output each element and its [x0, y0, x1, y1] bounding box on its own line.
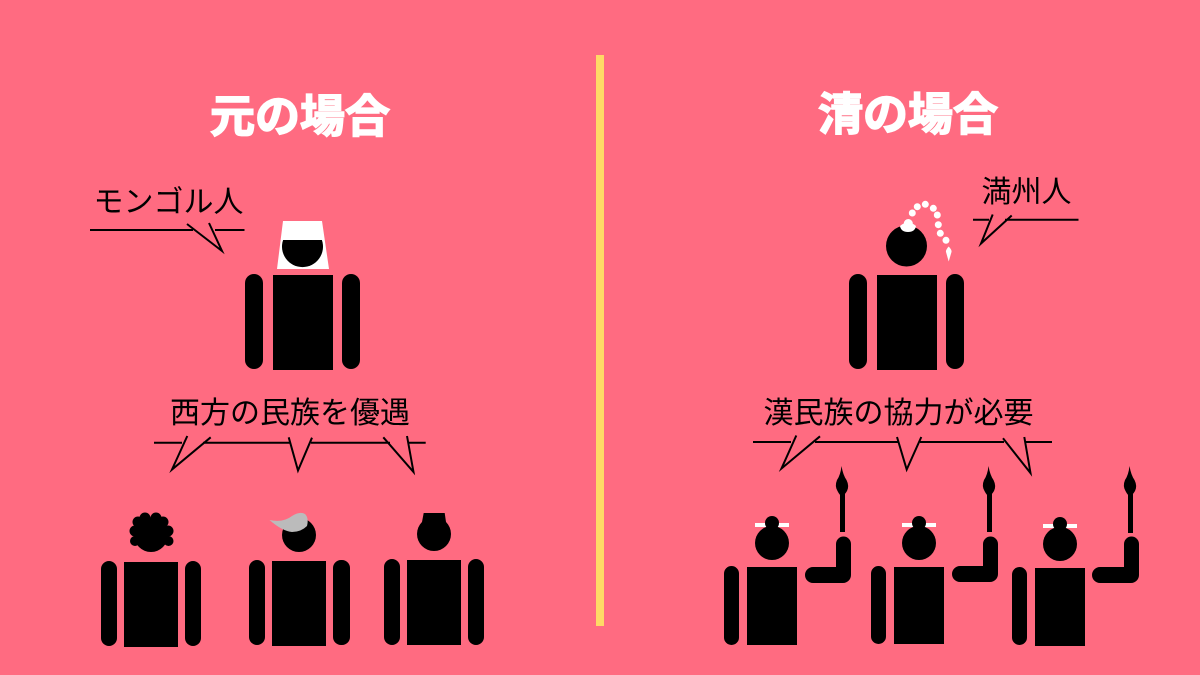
label: need Han cooperation: 漢民族の協力が必要 [764, 397, 1034, 430]
speech bubble: Mongols [90, 223, 244, 251]
title: Qing: 清の場合 [818, 89, 998, 140]
speech bubble: Han people [753, 436, 1052, 473]
title: Yuan: 元の場合 [210, 91, 390, 142]
figure: Mongol ruler [245, 221, 360, 370]
label: Mongols: モンゴル人 [94, 186, 244, 219]
figure: Han person 1 with torch [724, 466, 851, 645]
center divider [596, 55, 604, 626]
figure: Han person 2 with torch [871, 466, 998, 644]
figure: westerner with flat cap [384, 513, 484, 645]
figure: westerner with grey headwear [249, 513, 350, 646]
label: favoring western peoples: 西方の民族を優遇 [170, 397, 410, 430]
figure: Han person 3 with torch [1012, 466, 1139, 646]
figure: curly-haired westerner [101, 512, 201, 647]
speech bubble: Manchu [973, 214, 1078, 244]
label: Manchu: 満州人 [982, 176, 1072, 209]
figure: Manchu ruler [849, 201, 964, 370]
speech bubble: western peoples [154, 436, 426, 472]
